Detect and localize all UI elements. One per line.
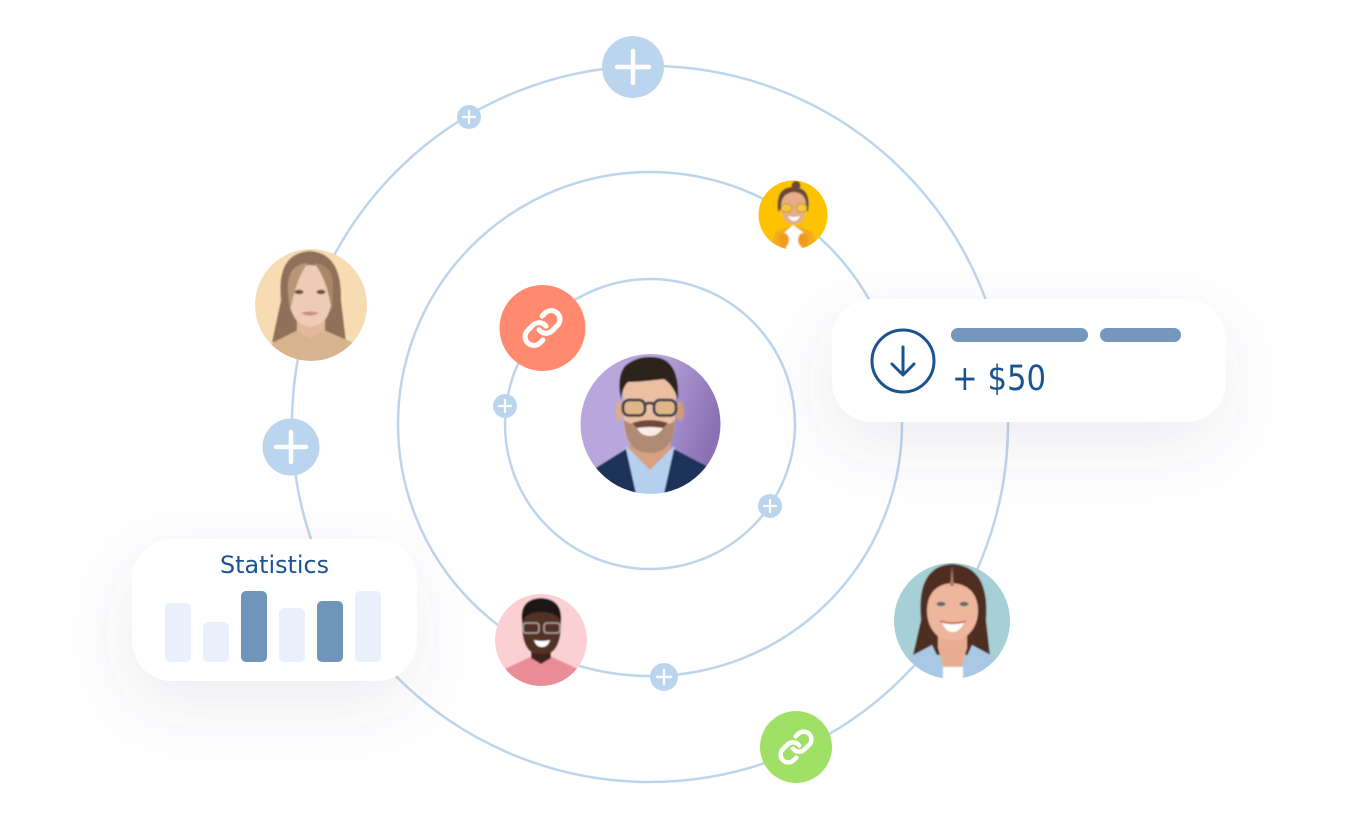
portrait: woman top right [758,180,828,249]
bar chart [165,591,381,662]
icon: coral link [500,285,586,371]
orbit rings [292,66,1008,782]
portrait: woman top left [255,249,367,361]
portrait: central man [580,354,720,494]
portrait: man bottom left [495,594,587,686]
placeholder bar long [951,328,1088,342]
placeholder bar short [1100,328,1181,342]
amount: + $50 [952,359,1046,399]
icon: download arrow [872,330,934,392]
heading: Statistics [220,551,329,579]
icon: small plus inner ring right [758,494,782,518]
icon: green link [760,711,832,783]
card: payment [832,299,1226,422]
icon: small plus bottom [650,663,678,691]
icon: small plus inner ring left [493,394,517,418]
icon: large plus top [602,36,664,98]
card: statistics [132,539,417,681]
icon: small plus upper left [457,105,481,129]
icon: large plus left [262,418,320,476]
orbit network infographic [128,36,1212,784]
portrait: woman bottom right [894,563,1010,678]
